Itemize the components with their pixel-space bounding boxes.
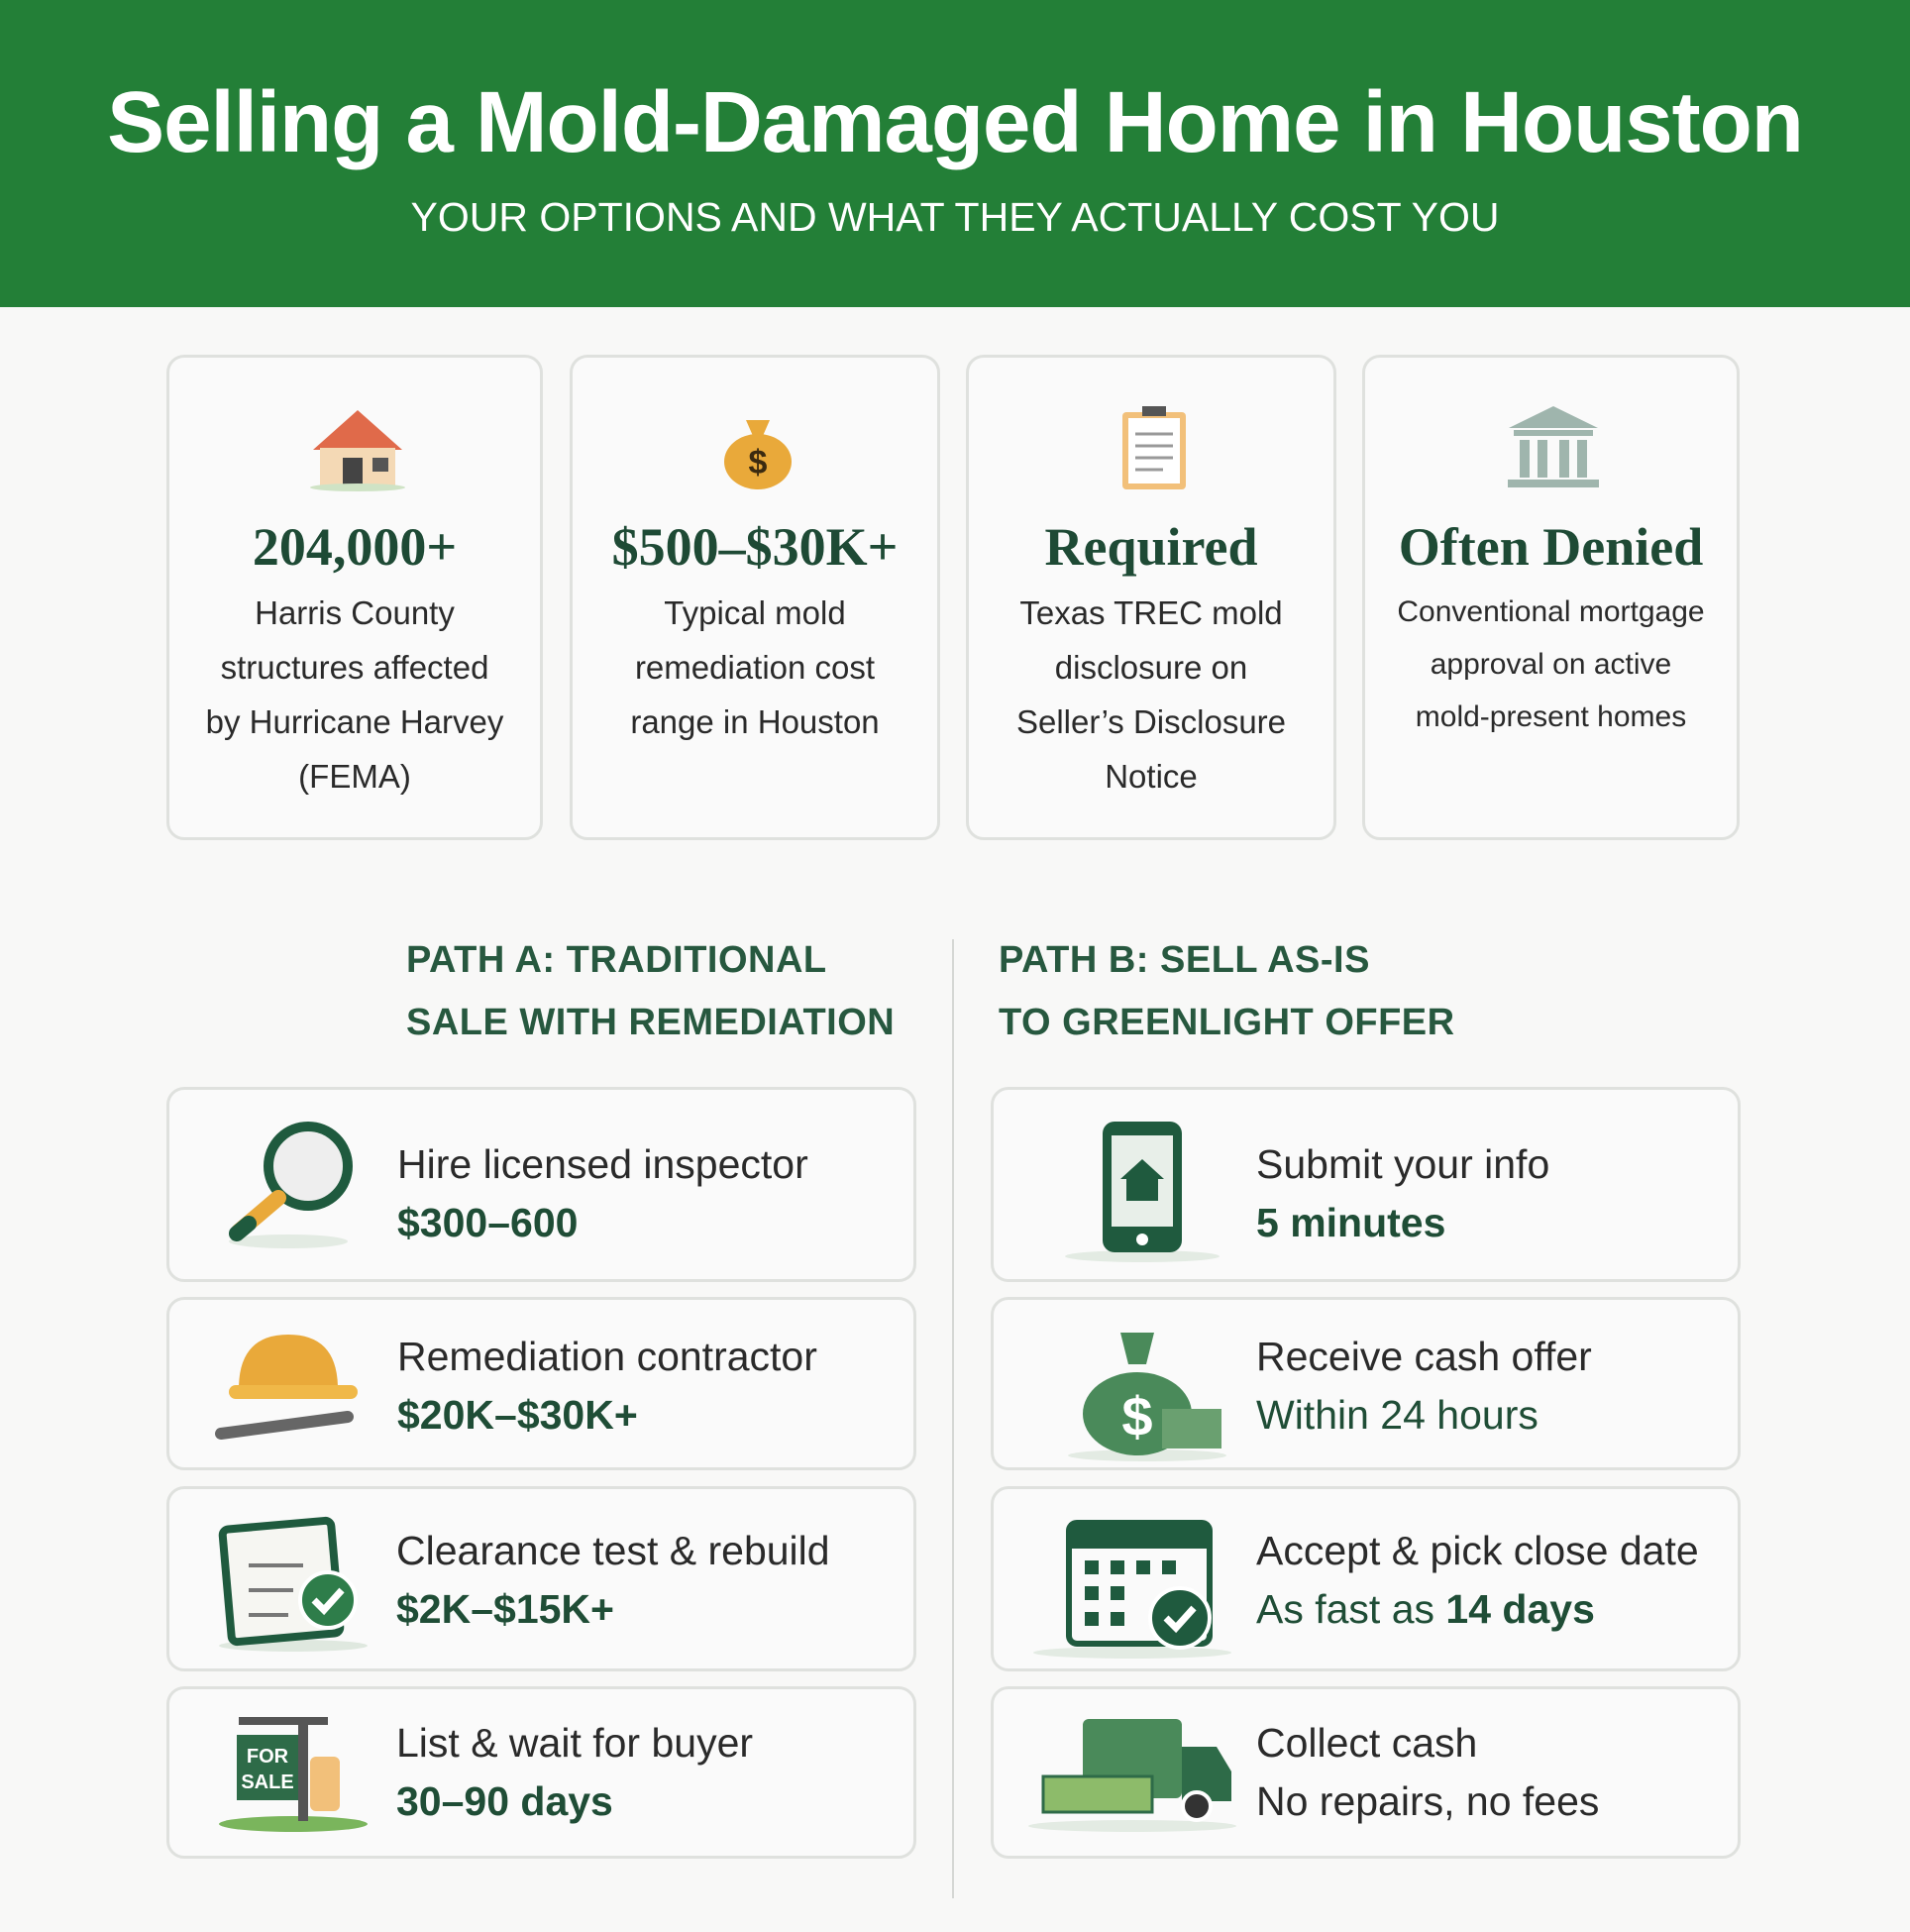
subtitle: YOUR OPTIONS AND WHAT THEY ACTUALLY COST YOU — [411, 194, 1499, 240]
header banner — [0, 0, 1910, 307]
step A4 — [166, 1686, 916, 1859]
icon: cash bag — [1068, 1333, 1226, 1461]
title: Selling a Mold-Damaged Home in Houston — [107, 74, 1803, 170]
icon: bank — [1508, 406, 1599, 487]
text — [630, 594, 880, 740]
text: $300–600 — [397, 1200, 578, 1245]
text: mold-present homes — [1416, 700, 1686, 733]
icon: phone — [1065, 1122, 1220, 1262]
text: disclosure on — [1055, 649, 1247, 686]
icon: calendar — [1033, 1520, 1231, 1659]
text: Notice — [1105, 758, 1198, 795]
path B heading — [999, 939, 1455, 1043]
text: Submit your info — [1256, 1141, 1549, 1187]
icon: money bag — [724, 420, 792, 489]
path B heading: TO GREENLIGHT OFFER — [999, 1002, 1455, 1043]
text: 30–90 days — [396, 1778, 613, 1824]
text: Collect cash — [1256, 1720, 1477, 1766]
text: remediation cost — [635, 649, 875, 686]
icon: for sale sign: FOR — [247, 1746, 289, 1768]
text: As fast as 14 days — [1256, 1586, 1595, 1632]
icon: magnifier — [229, 1122, 353, 1248]
text: $20K–$30K+ — [397, 1392, 638, 1438]
stat card: cost — [570, 355, 940, 840]
stat card: mortgage — [1362, 355, 1740, 840]
headline: 204,000+ — [253, 517, 457, 577]
step B1 — [991, 1087, 1741, 1282]
text — [1256, 1528, 1699, 1632]
path A heading: SALE WITH REMEDIATION — [406, 1002, 895, 1043]
step B2 — [991, 1297, 1741, 1470]
text: $2K–$15K+ — [396, 1586, 614, 1632]
text: 5 minutes — [1256, 1200, 1445, 1245]
icon: truck — [1028, 1719, 1236, 1832]
text: Clearance test & rebuild — [396, 1528, 830, 1573]
icon: cash bag: $ — [1121, 1385, 1153, 1448]
text: Hire licensed inspector — [397, 1141, 808, 1187]
icon: hard hat — [215, 1335, 358, 1440]
text: (FEMA) — [298, 758, 411, 795]
text: Receive cash offer — [1256, 1334, 1592, 1379]
text: Texas TREC mold — [1019, 594, 1283, 631]
text — [1256, 1720, 1599, 1824]
icon: for sale sign: SALE — [241, 1771, 294, 1793]
text: List & wait for buyer — [396, 1720, 753, 1766]
step A1 — [166, 1087, 916, 1282]
path B heading: PATH B: SELL AS-IS — [999, 939, 1370, 981]
path A heading — [406, 939, 895, 1043]
text: Remediation contractor — [397, 1334, 817, 1379]
text: Accept & pick close date — [1256, 1528, 1699, 1573]
icon: checklist — [218, 1516, 368, 1652]
text — [396, 1528, 830, 1632]
text — [397, 1334, 817, 1438]
icon: money bag: $ — [749, 444, 768, 482]
text: Harris County — [255, 594, 455, 631]
text — [1397, 595, 1705, 733]
headline: Often Denied — [1399, 517, 1703, 577]
text: approval on active — [1431, 648, 1671, 681]
icon: for sale sign — [219, 1717, 368, 1832]
step B3 — [991, 1486, 1741, 1671]
step A3 — [166, 1486, 916, 1671]
text: Within 24 hours — [1256, 1392, 1539, 1438]
stat card: disclosure — [966, 355, 1336, 840]
text — [206, 594, 503, 795]
text: by Hurricane Harvey — [206, 703, 503, 740]
text — [397, 1141, 808, 1245]
path A heading: PATH A: TRADITIONAL — [406, 939, 827, 981]
text: Conventional mortgage — [1397, 595, 1705, 628]
text: range in Houston — [630, 703, 880, 740]
headline: Required — [1044, 517, 1258, 577]
text — [1256, 1141, 1549, 1245]
text: Typical mold — [664, 594, 846, 631]
step B4 — [991, 1686, 1741, 1859]
text: structures affected — [221, 649, 488, 686]
text: No repairs, no fees — [1256, 1778, 1599, 1824]
icon: clipboard — [1122, 406, 1186, 489]
stat card: structures — [166, 355, 543, 840]
text: Seller’s Disclosure — [1016, 703, 1286, 740]
headline: $500–$30K+ — [612, 517, 898, 577]
text — [1256, 1334, 1592, 1438]
text — [396, 1720, 753, 1824]
icon: house — [310, 410, 405, 491]
text — [1016, 594, 1286, 795]
step A2 — [166, 1297, 916, 1470]
